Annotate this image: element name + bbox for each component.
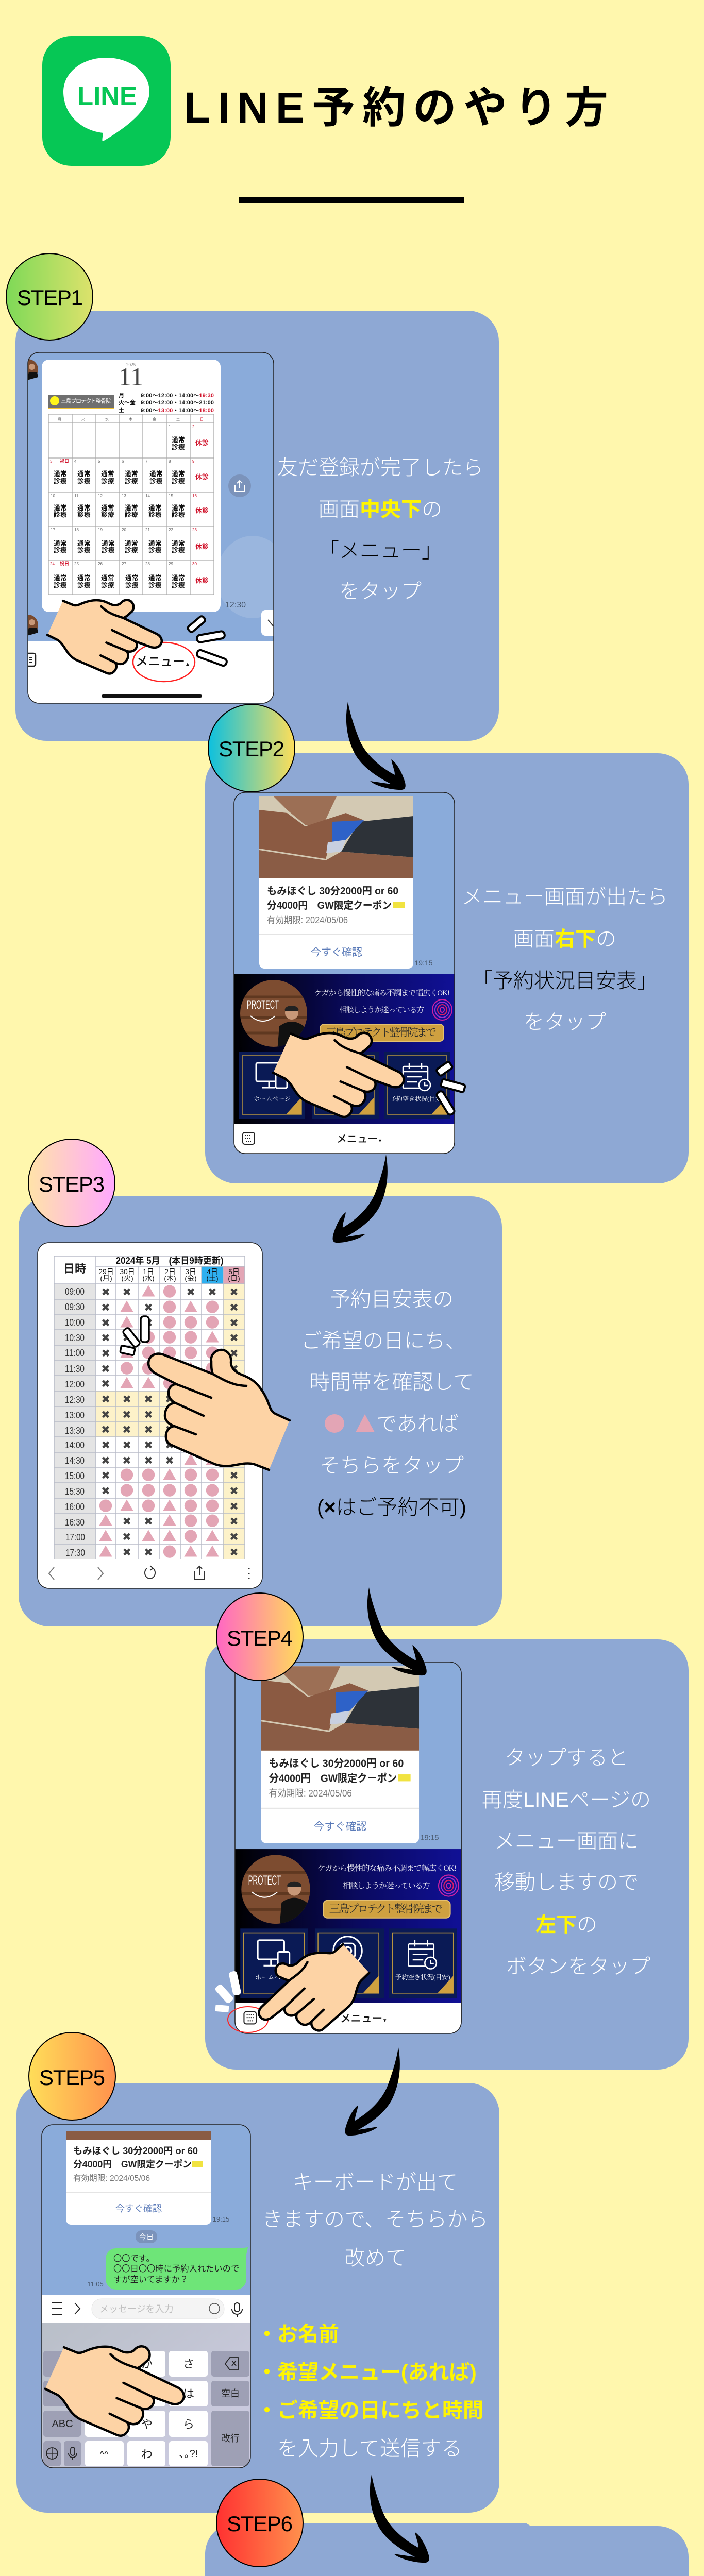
instruction text: であれば [376, 1413, 459, 1435]
phone screenshot: keyboard: ､｡?! [179, 2448, 198, 2460]
phone screenshot: calendar: 23 [192, 528, 197, 532]
instruction text: 友だ登録が完了したら [277, 456, 483, 479]
phone screenshot: calendar: 三島プロテクト整骨院 [61, 397, 111, 404]
instruction text: キーボードが出て [293, 2171, 458, 2194]
phone screenshot: rich menu: ホームページ [254, 1095, 291, 1103]
phone screenshot: calendar: 9:00～13:00・14:00～18:00 [141, 408, 214, 414]
phone screenshot: calendar: 診療 [172, 443, 185, 451]
instruction text: 移動しますので [494, 1871, 639, 1894]
phone screenshot: keyboard: もみほぐし 30分2000円 or 60 [73, 2146, 198, 2156]
phone screenshot: keyboard: ABC [52, 2418, 73, 2430]
phone screenshot: calendar: 月 [119, 392, 124, 399]
phone screenshot: availability table: 11:00 [65, 1348, 85, 1358]
phone screenshot: availability table: ✖✖ [101, 1378, 239, 1390]
instruction text: 時間帯を確認して [310, 1371, 474, 1394]
phone screenshot: availability table: (火) [121, 1274, 133, 1282]
phone screenshot: calendar: 25 [74, 562, 79, 566]
phone screenshot: calendar: 10 [51, 494, 55, 498]
phone screenshot: availability table [38, 1243, 290, 1588]
phone screenshot: calendar: 診療診療診療診療診療診療 [54, 546, 185, 554]
phone screenshot: calendar: 3 [50, 459, 53, 464]
phone screenshot: availability table: ✖✖ [122, 1531, 239, 1543]
phone screenshot: availability table: ●●▲●● [120, 1464, 220, 1484]
panel: step 6 [205, 2523, 689, 2576]
required items list: ・希望メニュー(あれば) [257, 2361, 477, 2384]
phone screenshot: keyboard: 有効期限: 2024/05/06 [73, 2174, 150, 2183]
arrow: step 1 to 2 [346, 702, 406, 790]
step badge: STEP2: STEP2 [219, 737, 284, 761]
phone screenshot: availability table: 12:00 [65, 1379, 85, 1389]
step badge: STEP3: STEP3 [39, 1172, 105, 1196]
phone screenshot: calendar: 通常通常通常通常通常通常 [54, 504, 185, 512]
phone screenshot: availability table: ▲▲●●● [120, 1372, 220, 1393]
phone screenshot: calendar: 土 [119, 406, 124, 414]
phone screenshot: availability table: ✖✖ [101, 1469, 239, 1482]
phone screenshot: calendar: 通常通常通常通常通常通常 [54, 539, 185, 547]
phone screenshot: calendar: 22 [169, 528, 173, 532]
required items list [257, 2323, 483, 2422]
step badge: STEP5 [29, 2032, 115, 2120]
phone screenshot: calendar: 15 [169, 494, 173, 498]
instruction text: ご希望の日にち、 [301, 1330, 466, 1352]
phone screenshot: availability table: 5日 [228, 1267, 240, 1276]
phone screenshot: availability table: 13:30 [65, 1426, 85, 1436]
phone screenshot: availability table: ●▲●▲●● [99, 1495, 220, 1515]
panel: step 1 [15, 311, 499, 741]
phone screenshot: availability table: 09:00 [65, 1286, 85, 1297]
phone screenshot: rich menu again: PROTECT [248, 1874, 281, 1888]
phone screenshot: calendar: 休診 [195, 506, 209, 514]
phone screenshot: availability table: 17:30 [65, 1548, 85, 1558]
icon: tap burst marks [120, 1316, 149, 1355]
phone screenshot: availability table: ▲▲●● [99, 1510, 220, 1530]
step badge: STEP3 [28, 1139, 115, 1227]
arrow: step 2 to 3 [333, 1155, 388, 1243]
phone screenshot: availability table: (土) [206, 1274, 219, 1282]
phone screenshot: rich menu again: もみほぐし 30分2000円 or 60 [269, 1758, 404, 1770]
phone screenshot: availability table: 17:00 [65, 1532, 85, 1543]
icon: tapping hand [148, 1350, 290, 1470]
instruction text: 「予約状況目安表」 [472, 970, 658, 992]
phone screenshot: keyboard: 今日 [139, 2233, 154, 2241]
phone screenshot: availability table: (日) [228, 1274, 240, 1282]
instruction text: きますので、そちらから [262, 2208, 488, 2231]
phone screenshot: calendar: 27 [122, 562, 126, 566]
required items list: ・お名前 [257, 2323, 339, 2346]
phone screenshot: calendar: 20 [122, 528, 126, 532]
phone screenshot: calendar: 通常 [172, 436, 185, 444]
step badge: STEP1 [6, 253, 93, 340]
phone screenshot: calendar: 8 [169, 459, 171, 464]
phone screenshot: keyboard: 分4000円 GW限定クーポン [73, 2159, 192, 2170]
phone screenshot: availability table: 09:30 [65, 1302, 85, 1312]
phone screenshot: calendar: 5 [98, 459, 100, 464]
phone screenshot: availability table: ✖✖✖ [101, 1301, 239, 1314]
phone screenshot: availability table: ✖✖✖✖✖✖✖ [101, 1409, 239, 1421]
instruction text: 予約目安表の [330, 1288, 454, 1311]
panel: step 3 [19, 1196, 502, 1626]
phone screenshot: rich menu: 有効期限: 2024/05/06 [267, 915, 348, 925]
phone screenshot: calendar: 通常通常通常通常通常通常 [54, 470, 185, 478]
phone screenshot: keyboard: 〇〇日〇〇時に予約入れたいので [113, 2264, 239, 2274]
phone screenshot: availability table: ●●●▲ [141, 1327, 220, 1347]
instruction text: メニュー画面が出たら [462, 886, 668, 908]
icon: LINE logo [42, 36, 171, 166]
instruction text: をタップ [524, 1011, 606, 1033]
phone screenshot: availability table: ✖✖✖ [101, 1317, 239, 1329]
phone screenshot: calendar: 休診 [195, 543, 209, 550]
phone screenshot: rich menu again: 有効期限: 2024/05/06 [269, 1788, 352, 1799]
phone screenshot: availability table: ▲● [141, 1281, 176, 1301]
panel: step 2 [205, 753, 689, 1183]
instruction text: 改めて [344, 2247, 406, 2269]
phone screenshot: availability table: ✖✖✖✖✖ [101, 1286, 239, 1298]
tap circle: keyboard button [228, 2007, 268, 2032]
phone screenshot: availability table: ✖✖✖ [122, 1546, 239, 1558]
instruction text [482, 1747, 651, 1978]
phone screenshot: calendar: 12:30 [225, 601, 246, 609]
phone screenshot: rich menu again: 三島プロテクト整骨院まで [329, 1903, 443, 1915]
icon: tapping hand [38, 567, 166, 697]
phone screenshot: availability table: ▲●▲▲ [99, 1541, 220, 1561]
phone screenshot: rich menu again: ケガから慢性的な痛み不調まで幅広くOK! [317, 1863, 457, 1873]
phone screenshot: availability table: 10:30 [65, 1333, 85, 1343]
phone screenshot: keyboard: ら [183, 2418, 194, 2431]
instruction text: ボタンをタップ [506, 1955, 650, 1978]
phone screenshot: calendar: 9 [192, 459, 195, 464]
phone screenshot: availability table: 15:00 [65, 1471, 85, 1481]
phone screenshot: availability table: 30日 [120, 1267, 135, 1276]
phone screenshot: rich menu again: 今すぐ確認 [314, 1821, 367, 1833]
phone screenshot: availability table: (木) [164, 1274, 176, 1282]
phone screenshot: availability table: 14:30 [65, 1455, 85, 1466]
phone screenshot: availability table: ✖✖✖ [122, 1515, 239, 1528]
phone screenshot: keyboard: さ [183, 2358, 194, 2370]
phone screenshot: rich menu: 三島プロテクト整骨院まで [326, 1026, 437, 1039]
instruction text: タップすると [505, 1747, 628, 1769]
phone screenshot: calendar: 13 [122, 494, 126, 498]
phone screenshot: availability table: ✖✖✖ [101, 1332, 239, 1344]
phone screenshot: calendar: 9:00～12:00・14:00～19:30 [141, 393, 214, 399]
phone screenshot: keyboard: わ [141, 2448, 153, 2461]
instruction text: 「メニュー」 [319, 539, 442, 562]
phone screenshot: availability table: 10:00 [65, 1317, 85, 1328]
phone screenshot: availability table: ▲▲▲●▲ [99, 1526, 220, 1546]
phone screenshot: availability table: 2日 [164, 1267, 176, 1276]
phone screenshot: calendar: 診療診療診療診療診療診療 [54, 511, 185, 518]
phone screenshot: calendar: 21 [145, 528, 150, 532]
phone screenshot: rich menu: 分4000円 GW限定クーポン [267, 900, 392, 911]
icon: tap burst marks [187, 615, 228, 667]
phone screenshot: calendar: 診療診療診療診療診療診療 [54, 581, 185, 589]
phone screenshot: availability table: 11:30 [65, 1364, 85, 1374]
phone screenshot: availability table: 29日 [98, 1267, 114, 1276]
instruction text [301, 1288, 474, 1519]
step badge: STEP6 [216, 2479, 303, 2567]
phone screenshot: availability table: (水) [142, 1274, 155, 1282]
instruction text: (×はご予約不可) [317, 1496, 466, 1519]
phone screenshot: rich menu [234, 792, 465, 1154]
instruction text: 画面中央下の [319, 498, 442, 521]
phone screenshot: keyboard: 今すぐ確認 [115, 2204, 162, 2214]
phone screenshot: calendar: 17 [51, 528, 55, 532]
phone screenshot: keyboard: 空白 [221, 2388, 240, 2399]
phone screenshot: calendar: 26 [98, 562, 103, 566]
phone screenshot: availability table: ✖✖ [101, 1347, 239, 1360]
phone screenshot: calendar: 30 [192, 562, 197, 566]
phone screenshot: calendar [18, 352, 289, 703]
arrow: step 5 to 6 [370, 2475, 429, 2563]
icon: tapping hand [262, 995, 409, 1143]
phone screenshot: rich menu: 相談しようか迷っている方 [339, 1005, 424, 1014]
phone screenshot: calendar: 2 [192, 425, 195, 429]
phone screenshot: calendar: 4 [74, 459, 77, 464]
phone screenshot: availability table: ✖✖✖✖✖✖✖ [101, 1423, 239, 1436]
arrow: step 3 to 4 [367, 1587, 427, 1675]
instruction text [257, 2171, 488, 2460]
instruction text: 左下の [535, 1913, 597, 1936]
phone screenshot: rich menu: メニュー▼ [337, 1133, 382, 1145]
phone screenshot: availability table: 日時 [63, 1262, 86, 1275]
step badge: STEP5: STEP5 [39, 2065, 105, 2090]
phone screenshot: availability table: 3日 [185, 1267, 196, 1276]
instruction text: メニュー画面に [494, 1830, 639, 1853]
phone screenshot: rich menu: ケガから慢性的な痛み不調まで幅広くOK! [314, 988, 450, 997]
phone screenshot: calendar: 9:00～12:00・14:00～21:00 [141, 400, 214, 406]
phone screenshot: rich menu: PROTECT [247, 998, 279, 1012]
phone screenshot: rich menu again: ホームページ [255, 1974, 293, 1981]
icon: LINE logo: LINE [77, 81, 137, 111]
phone screenshot: availability table: 12:30 [65, 1395, 85, 1405]
phone screenshot: calendar: 11 [74, 494, 79, 498]
step badge: STEP6: STEP6 [227, 2512, 293, 2536]
phone screenshot: availability table: ●●●●● [120, 1480, 220, 1500]
arrow: step 4 to 5 [345, 2047, 400, 2136]
instruction text: そちらをタップ [320, 1454, 464, 1477]
phone screenshot: availability table: (月) [100, 1274, 112, 1282]
icon: circle and triangle marks [325, 1414, 375, 1433]
phone screenshot: calendar: 休診 [195, 577, 209, 584]
phone screenshot: rich menu again: 分4000円 GW限定クーポン [269, 1772, 397, 1784]
instruction text [462, 886, 668, 1033]
phone screenshot: availability table: ▲▲ [183, 1449, 220, 1469]
phone screenshot: calendar: 休診 [195, 473, 209, 481]
instruction text [277, 456, 483, 603]
phone screenshot: availability table: 15:30 [65, 1486, 85, 1497]
phone screenshot: availability table: 1日 [143, 1267, 154, 1276]
step badge: STEP4 [216, 1593, 303, 1681]
phone screenshot: availability table: ✖✖✖✖✖ [101, 1454, 239, 1467]
icon: tap burst marks [435, 1061, 465, 1116]
icon: tap burst marks [214, 1971, 242, 2012]
instruction text: 再度LINEページの [482, 1789, 651, 1811]
step badge: STEP2 [208, 704, 295, 792]
phone screenshot: rich menu: もみほぐし 30分2000円 or 60 [267, 885, 398, 897]
phone screenshot: rich menu: 予約空き状況(目安) [390, 1095, 444, 1103]
panel: step 4 [205, 1639, 689, 2070]
phone screenshot: calendar: 祝日 [60, 458, 69, 464]
phone screenshot: availability table: ▲●●● [120, 1312, 220, 1332]
phone screenshot: rich menu: 今すぐ確認 [311, 946, 362, 958]
phone screenshot: keyboard: か [141, 2358, 153, 2370]
phone screenshot: availability table: ✖✖ [101, 1363, 239, 1375]
phone screenshot: availability table: 4日 [207, 1267, 218, 1276]
phone screenshot: calendar: 1 [169, 425, 171, 429]
phone screenshot: calendar: 月火水木金土 [58, 417, 180, 421]
phone screenshot: availability table: ▲●●●● [120, 1342, 220, 1362]
instruction text: を入力して送信する [277, 2437, 462, 2460]
icon: tapping hand [254, 1923, 375, 2052]
phone screenshot: keyboard: 19:15 [213, 2215, 229, 2223]
phone screenshot: keyboard [33, 2125, 250, 2468]
title underline rule [239, 197, 464, 203]
phone screenshot: calendar: 診療診療診療診療診療診療 [54, 477, 185, 485]
phone screenshot: calendar: 7 [145, 459, 148, 464]
instruction text: 画面右下の [513, 928, 616, 951]
phone screenshot: availability table: ✖✖✖✖✖✖✖ [101, 1439, 239, 1451]
phone screenshot: availability table: 16:30 [65, 1517, 85, 1528]
phone screenshot: availability table: ✖ [229, 1500, 239, 1513]
tap circle: menu [133, 642, 195, 682]
title: LINE予約のやり方 [184, 83, 608, 132]
phone screenshot: calendar: 祝日 [60, 561, 69, 566]
phone screenshot: keyboard: や [141, 2418, 153, 2431]
phone screenshot: rich menu again [214, 1662, 461, 2052]
phone screenshot: calendar: 火～金 [119, 399, 136, 406]
phone screenshot: calendar: 2025 [126, 362, 136, 367]
phone screenshot: calendar: 19 [98, 528, 103, 532]
panel: step 5 [16, 2083, 499, 2513]
phone screenshot: rich menu again: 相談しようか迷っている方 [343, 1881, 430, 1890]
phone screenshot: rich menu again: メニュー▼ [340, 2012, 387, 2024]
phone screenshot: availability table: 14:00 [65, 1440, 85, 1450]
phone screenshot: calendar: 24 [50, 562, 55, 566]
phone screenshot: calendar: 29 [169, 562, 173, 566]
phone screenshot: rich menu again: 19:15 [421, 1834, 439, 1842]
phone screenshot: calendar: 16 [192, 494, 197, 498]
phone screenshot: calendar: 12 [98, 494, 103, 498]
step badge: STEP4: STEP4 [227, 1626, 293, 1650]
phone screenshot: keyboard: 〇〇です。 [113, 2254, 155, 2263]
phone screenshot: calendar: 14 [145, 494, 150, 498]
phone screenshot: calendar: 28 [145, 562, 150, 566]
phone screenshot: keyboard: すが空いてますか？ [113, 2275, 188, 2284]
phone screenshot: availability table: 13:00 [65, 1410, 85, 1420]
phone screenshot: rich menu again: 予約空き状況(目安) [395, 1973, 450, 1981]
phone screenshot: keyboard: ^^ [100, 2449, 109, 2460]
phone screenshot: availability table: 16:00 [65, 1502, 85, 1512]
phone screenshot: keyboard: は [183, 2387, 194, 2400]
phone screenshot: rich menu: 19:15 [414, 959, 433, 967]
step badge: STEP1: STEP1 [17, 285, 83, 310]
required items list: ・ご希望の日にちと時間 [257, 2399, 483, 2422]
phone screenshot: calendar: 休診 [195, 439, 209, 447]
phone screenshot: availability table: (金) [185, 1274, 197, 1282]
phone screenshot: availability table: 2024年 5月 (本日9時更新) [115, 1255, 224, 1266]
phone screenshot: calendar: 通常通常通常通常通常通常 [54, 574, 185, 582]
phone screenshot: calendar: 日 [200, 417, 204, 421]
phone screenshot: calendar: 11 [119, 362, 143, 391]
phone screenshot: keyboard: メッセージを入力 [99, 2304, 174, 2314]
phone screenshot: availability table: ✖✖✖✖✖✖✖ [101, 1393, 239, 1405]
phone screenshot: availability table: ▲●▲● [120, 1296, 220, 1316]
phone screenshot: keyboard: 11:05 [87, 2280, 104, 2288]
instruction text: をタップ [339, 580, 422, 603]
phone screenshot: availability table: ●●●▲● [120, 1358, 220, 1378]
phone screenshot: availability table: ✖✖ [101, 1485, 239, 1497]
icon: tapping hand [33, 2307, 190, 2464]
phone screenshot: calendar: 6 [122, 459, 124, 464]
phone screenshot: calendar: メニュー▲ [136, 655, 190, 669]
phone screenshot: calendar: 18 [74, 528, 79, 532]
phone screenshot: keyboard: 改行 [221, 2433, 240, 2444]
